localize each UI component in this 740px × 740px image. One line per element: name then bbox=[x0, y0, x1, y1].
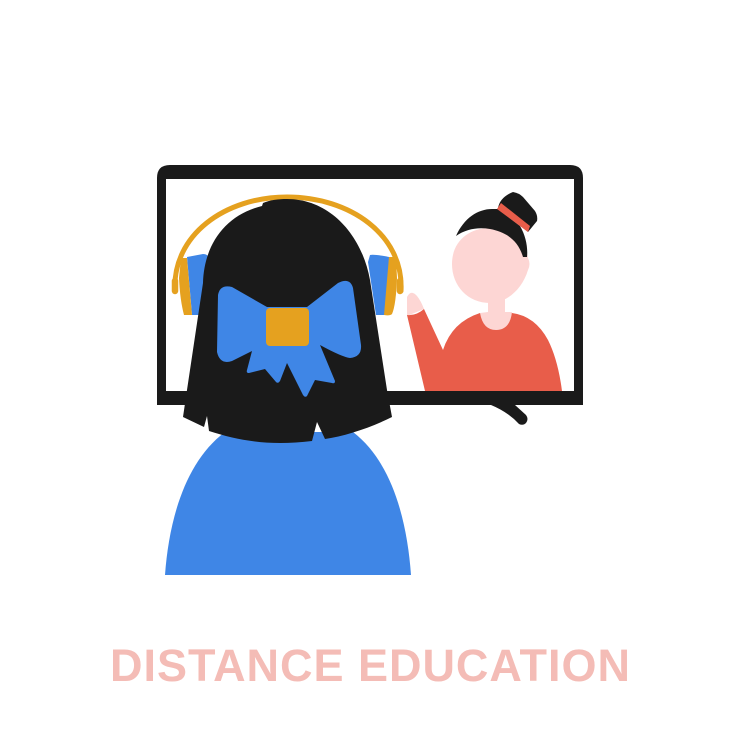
teacher neck and collar bbox=[480, 298, 512, 330]
right ear cup bbox=[368, 255, 389, 315]
teacher bun bbox=[498, 192, 537, 232]
teacher on screen bbox=[407, 192, 562, 391]
left ear cup bbox=[187, 254, 209, 315]
teacher hand bbox=[407, 293, 424, 316]
student body bbox=[165, 432, 411, 575]
left pad bbox=[179, 258, 192, 315]
teacher hair bbox=[456, 209, 527, 257]
right hook bbox=[397, 281, 403, 291]
bow ribbon bbox=[217, 281, 361, 397]
bow center knot bbox=[266, 308, 309, 346]
headphones bbox=[175, 197, 401, 315]
teacher head bbox=[452, 228, 530, 303]
teacher hair band bbox=[497, 203, 530, 232]
monitor bbox=[157, 165, 583, 425]
headband bbox=[175, 197, 401, 291]
hair bow bbox=[217, 281, 361, 397]
title: DISTANCE EDUCATION bbox=[110, 640, 630, 691]
teacher sweater bbox=[407, 309, 562, 391]
left hook bbox=[172, 281, 178, 291]
right pad bbox=[384, 257, 397, 315]
monitor stand bbox=[491, 405, 528, 425]
student hair bbox=[183, 199, 392, 443]
